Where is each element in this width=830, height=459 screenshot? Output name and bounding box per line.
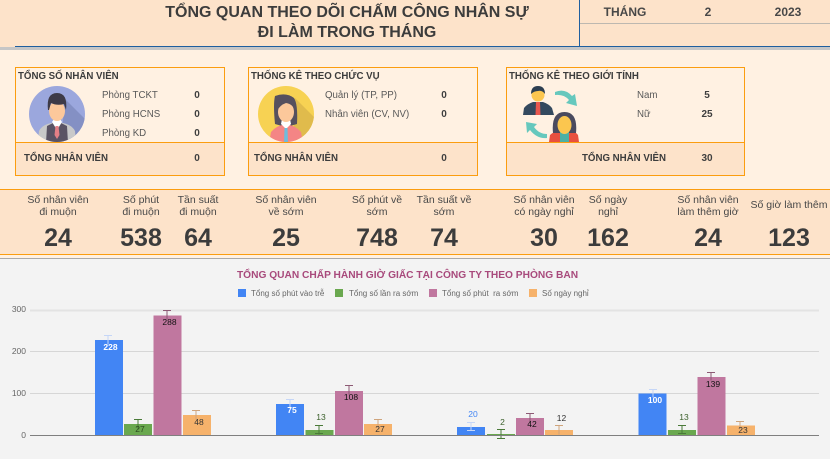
KPI value: 123	[768, 224, 810, 252]
y axis and gridlines: 200	[12, 346, 26, 356]
KPI label: overtime hours: Số giờ làm thêm	[751, 199, 827, 211]
month label: THÁNG	[604, 5, 646, 19]
title	[165, 2, 529, 41]
total row	[16, 142, 224, 175]
total value: 0	[194, 153, 200, 164]
KPI label: late employees	[27, 194, 89, 218]
icon: woman avatar	[258, 86, 314, 142]
department group 1: 228	[103, 342, 118, 352]
row: Phòng TCKT: Phòng TCKT	[102, 90, 158, 101]
department group 1: 48	[194, 417, 204, 427]
KPI label: early leavers	[255, 194, 317, 218]
header band	[0, 0, 830, 50]
total row	[249, 142, 477, 175]
legend: Tổng số phút vào trễ	[251, 289, 325, 298]
icon: man and woman exchange	[523, 86, 579, 142]
row: Phòng HCNS: Phòng HCNS	[102, 109, 160, 120]
department group 3	[457, 409, 573, 438]
year value: 2023	[775, 5, 801, 19]
legend: Tổng số lần ra sớm	[349, 289, 419, 298]
KPI label: days off: nghỉ	[598, 206, 618, 218]
total value: 30	[701, 153, 713, 164]
department group 1: 27	[135, 424, 145, 434]
KPI label: overtime employees: làm thêm giờ	[677, 206, 739, 218]
KPI value: 30	[530, 224, 558, 252]
department group 3: 2	[500, 417, 505, 427]
KPI label: overtime employees	[677, 194, 739, 218]
department group 4: 139	[706, 379, 720, 389]
total value: 0	[441, 153, 447, 164]
KPI label: employees with days off	[513, 194, 575, 218]
total label: TỔNG NHÂN VIÊN	[582, 153, 666, 164]
KPI label: days off: Số ngày	[589, 194, 627, 206]
department group 3: 12	[557, 413, 566, 423]
row: Nữ: Nữ	[637, 109, 650, 120]
KPI label: late frequency: Tần suất	[178, 194, 218, 206]
row: Quản lý: Quản lý (TP, PP)	[325, 90, 397, 101]
department group 4	[638, 372, 755, 435]
chart title: TỔNG QUAN CHẤP HÀNH GIỜ GIẤC TẠI CÔNG TY THEO PHÒNG BAN	[237, 270, 578, 281]
department group 4: 23	[738, 425, 748, 435]
month value: 2	[705, 5, 711, 19]
KPI label: employees with days off: Số nhân viên	[513, 194, 575, 206]
legend: Tổng số phút ra sớm	[442, 289, 519, 298]
title: TỔNG QUAN THEO DÕI CHẤM CÔNG NHÂN SỰ	[165, 4, 529, 21]
KPI label: early leavers: Số nhân viên	[255, 194, 317, 206]
KPI label: late employees: đi muộn	[39, 206, 77, 218]
KPI label: early minutes: sớm	[367, 206, 387, 218]
KPI label: early leavers: về sớm	[269, 206, 303, 218]
y axis and gridlines: 100	[12, 388, 26, 398]
KPI label: late frequency: đi muộn	[179, 206, 217, 218]
value: 0	[441, 90, 447, 101]
value: 0	[194, 109, 200, 120]
KPI value: 25	[272, 224, 300, 252]
KPI value: 538	[120, 224, 162, 252]
department group 1: 288	[162, 317, 177, 327]
icon: man avatar	[29, 86, 85, 142]
panel: by gender	[506, 67, 745, 176]
department group 3: 20	[468, 409, 478, 419]
bar chart	[12, 288, 819, 440]
panel heading: THỐNG KÊ THEO GIỚI TÍNH	[509, 71, 639, 82]
KPI label: early frequency: sớm	[434, 206, 454, 218]
KPI value: 748	[356, 224, 398, 252]
KPI value: 64	[184, 224, 212, 252]
x axis	[30, 434, 819, 436]
KPI label: late employees: Số nhân viên	[27, 194, 89, 206]
row: Nam: Nam	[637, 90, 657, 101]
value: 25	[701, 109, 713, 120]
panel: by position	[248, 67, 478, 176]
title: ĐI LÀM TRONG THÁNG	[258, 24, 436, 41]
KPI label: early frequency	[416, 194, 471, 218]
KPI label: late frequency	[178, 194, 218, 218]
KPI label: early minutes: Số phút về	[352, 194, 402, 206]
total label: TỔNG NHÂN VIÊN	[254, 153, 338, 164]
y axis and gridlines: 300	[12, 304, 26, 314]
panel heading: TỔNG SỐ NHÂN VIÊN	[18, 71, 119, 82]
panel: total employees	[15, 67, 225, 176]
department group 2	[276, 386, 392, 435]
department group 2: 75	[287, 405, 297, 415]
chart panel	[0, 258, 830, 459]
y axis and gridlines: 0	[21, 430, 26, 440]
KPI band	[0, 189, 830, 255]
legend	[238, 289, 589, 298]
department group 2: 27	[375, 424, 385, 434]
legend: Số ngày nghỉ	[542, 289, 589, 298]
KPI value: 24	[44, 224, 72, 252]
department group 2: 13	[316, 412, 326, 422]
department group 3: 42	[527, 419, 537, 429]
panel heading: THỐNG KÊ THEO CHỨC VỤ	[251, 71, 380, 82]
department group 1	[95, 310, 211, 435]
department group 2: 108	[344, 392, 358, 402]
KPI value: 24	[694, 224, 722, 252]
KPI label: early frequency: Tần suất về	[417, 194, 471, 206]
value: 5	[704, 90, 710, 101]
row: Phòng KD: Phòng KD	[102, 128, 146, 139]
KPI label: early minutes	[352, 194, 402, 218]
KPI label: late minutes	[122, 194, 160, 218]
KPI label: late minutes: Số phút	[123, 194, 159, 206]
KPI label: days off	[589, 194, 628, 218]
y axis and gridlines	[12, 304, 819, 440]
KPI label: overtime employees: Số nhân viên	[677, 194, 739, 206]
KPI label: employees with days off: có ngày nghỉ	[514, 206, 574, 218]
department group 4: 13	[679, 412, 689, 422]
KPI label: late minutes: đi muộn	[122, 206, 160, 218]
value: 0	[194, 128, 200, 139]
KPI value: 74	[430, 224, 458, 252]
department group 4: 100	[648, 395, 662, 405]
total label: TỔNG NHÂN VIÊN	[24, 153, 108, 164]
row: Nhân viên: Nhân viên (CV, NV)	[325, 109, 409, 120]
KPI value: 162	[587, 224, 629, 252]
total row	[507, 142, 744, 175]
value: 0	[441, 109, 447, 120]
value: 0	[194, 90, 200, 101]
